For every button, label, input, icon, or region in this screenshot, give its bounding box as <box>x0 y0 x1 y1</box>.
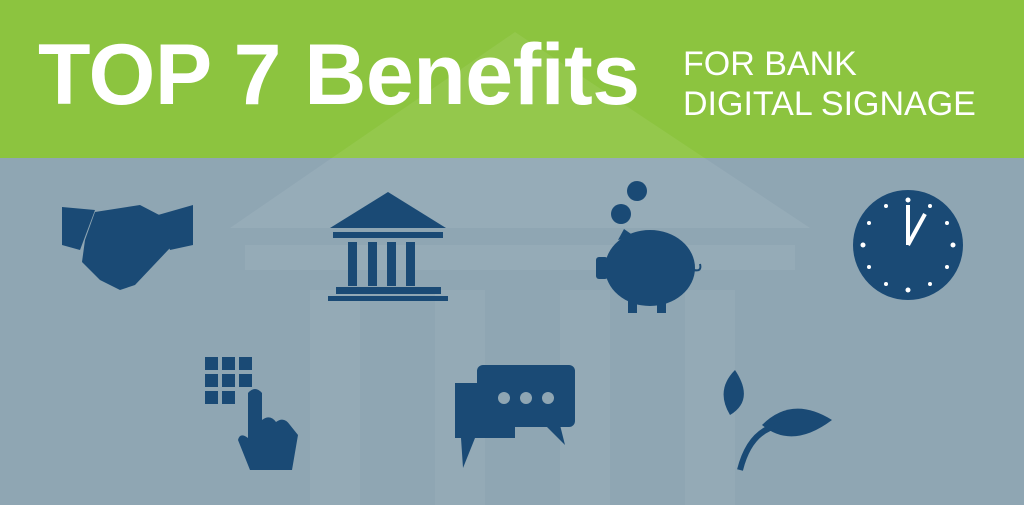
title: TOP 7 Benefits <box>38 27 640 123</box>
icon: handshake <box>62 205 193 290</box>
subtitle <box>683 45 976 123</box>
subtitle: FOR BANK <box>683 45 857 83</box>
icon: clock <box>853 190 963 300</box>
icon: keypad with finger <box>205 357 298 470</box>
icon: piggy bank with coins <box>596 181 700 313</box>
subtitle: DIGITAL SIGNAGE <box>683 85 976 123</box>
icon: chat bubbles <box>455 365 575 468</box>
icon: bank <box>328 192 448 301</box>
icon: leaves <box>724 370 832 470</box>
